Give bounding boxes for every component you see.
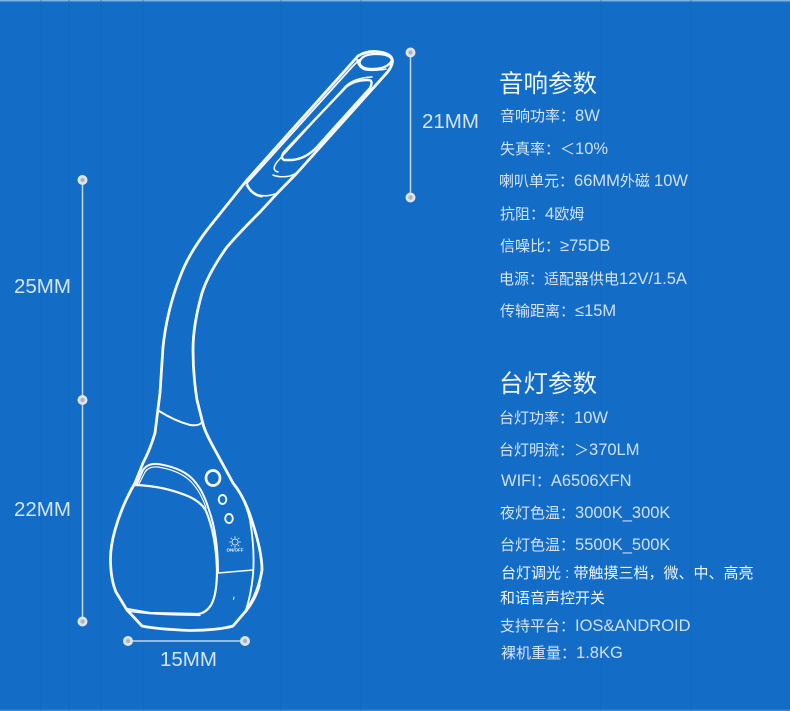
panel: lamp parameters [499, 371, 754, 662]
spec: lamp color temperature: 台灯色温：5500K_500K [500, 536, 670, 554]
lamp base: ON/OFF [226, 548, 244, 552]
spec: dimming: 台灯调光 : 带触摸三档，微、中、高亮 [501, 565, 754, 582]
spec: wifi: WIFI：A6506XFN [501, 472, 632, 490]
heading: lamp parameters: 台灯参数 [499, 371, 597, 398]
lamp neck [155, 180, 260, 433]
label: 22MM: 22MM [14, 498, 71, 521]
spec: lamp power: 台灯功率：10W [499, 409, 608, 427]
spec: SNR: 信噪比：≥75DB [500, 237, 610, 255]
spec: dimming continued: 和语音声控开关 [500, 590, 605, 607]
heading: audio parameters: 音响参数 [499, 71, 597, 98]
dimension: 25MM and 22MM [78, 175, 88, 626]
spec: weight: 裸机重量：1.8KG [501, 644, 623, 662]
label: 15MM: 15MM [160, 648, 217, 671]
icon: brightness sun [230, 536, 240, 548]
lamp head [246, 51, 392, 212]
spec: distortion: 失真率：＜10% [500, 140, 608, 158]
spec: impedance: 抗阻：4欧姆 [500, 205, 584, 223]
spec: night color temperature: 夜灯色温：3000K_300K [500, 504, 670, 522]
spec: platforms: 支持平台：IOS&ANDROID [500, 617, 691, 635]
label: 25MM: 25MM [14, 275, 71, 298]
spec: power: 音响功率：8W [500, 107, 600, 125]
lamp base [110, 424, 262, 630]
label: 21MM: 21MM [422, 110, 479, 133]
spec: speaker unit: 喇叭单元：66MM外磁 10W [499, 172, 688, 190]
dimension: 15MM [123, 636, 250, 646]
spec: power supply: 电源：适配器供电12V/1.5A [499, 270, 687, 288]
panel: audio parameters [499, 71, 688, 320]
dimension: 21MM [406, 48, 416, 202]
spec: luminous flux: 台灯明流：＞370LM [499, 441, 639, 459]
spec: range: 传输距离：≤15M [500, 302, 616, 320]
